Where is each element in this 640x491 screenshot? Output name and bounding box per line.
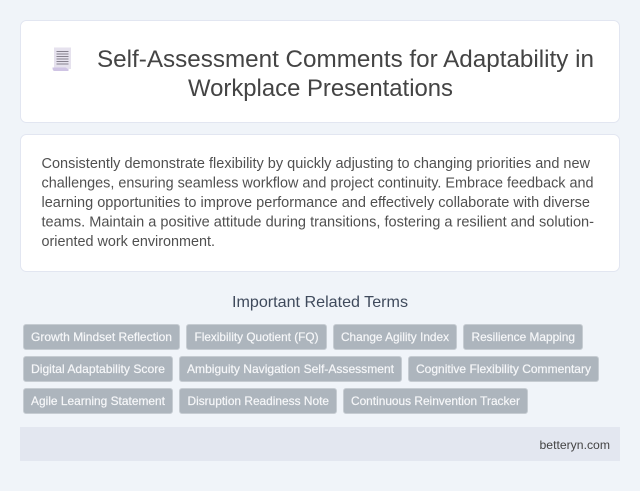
tag: Digital Adaptability Score (24, 356, 172, 382)
tag: Flexibility Quotient (FQ): Flexibility Quotient (FQ) (194, 330, 319, 344)
text block: summary: oriented work environment. (42, 234, 215, 250)
tag: Continuous Reinvention Tracker (344, 388, 528, 414)
tag: Flexibility Quotient (FQ) (186, 324, 326, 350)
text block: summary: learning opportunities to improve performance and effectively collaborate with diverse (42, 195, 590, 211)
tag: Resilience Mapping: Resilience Mapping (472, 330, 575, 344)
footer (20, 427, 620, 461)
tag: Growth Mindset Reflection: Growth Mindset Reflection (31, 330, 172, 344)
title (97, 46, 594, 102)
tag: Ambiguity Navigation Self-Assessment (180, 356, 402, 382)
tags: related terms (24, 324, 598, 414)
tag: Agile Learning Statement: Agile Learning Statement (31, 394, 166, 408)
text block: summary (42, 156, 594, 250)
tag: Resilience Mapping (464, 324, 582, 350)
panel: summary text (20, 134, 620, 272)
tag: Cognitive Flexibility Commentary (408, 356, 598, 382)
tag: Continuous Reinvention Tracker: Continuous Reinvention Tracker (351, 394, 520, 408)
title: Self-Assessment Comments for Adaptability in (97, 46, 594, 73)
tag: Digital Adaptability Score: Digital Adaptability Score (31, 362, 165, 376)
icon: document receipt (52, 48, 71, 71)
tag: Agile Learning Statement (24, 388, 172, 414)
tag: Cognitive Flexibility Commentary: Cognitive Flexibility Commentary (416, 362, 591, 376)
text block: summary: teams. Maintain a positive attitude during transitions, fostering a resilient and solution- (42, 214, 594, 230)
text block: summary: Consistently demonstrate flexibility by quickly adjusting to changing priorities and new (42, 156, 591, 172)
tag: Change Agility Index: Change Agility Index (341, 330, 449, 344)
title: Workplace Presentations (188, 75, 453, 102)
tag: Ambiguity Navigation Self-Assessment: Ambiguity Navigation Self-Assessment (187, 362, 395, 376)
footer: source: betteryn.com (540, 438, 610, 452)
tag: Disruption Readiness Note (180, 388, 336, 414)
heading: important related terms: Important Related Terms (232, 294, 408, 311)
panel: header (20, 20, 620, 122)
tag: Change Agility Index (334, 324, 456, 350)
text block: summary: challenges, ensuring seamless workflow and project continuity. Embrace feedback and (42, 176, 594, 192)
tag: Disruption Readiness Note: Disruption Readiness Note (188, 394, 329, 408)
tag: Growth Mindset Reflection (24, 324, 180, 350)
